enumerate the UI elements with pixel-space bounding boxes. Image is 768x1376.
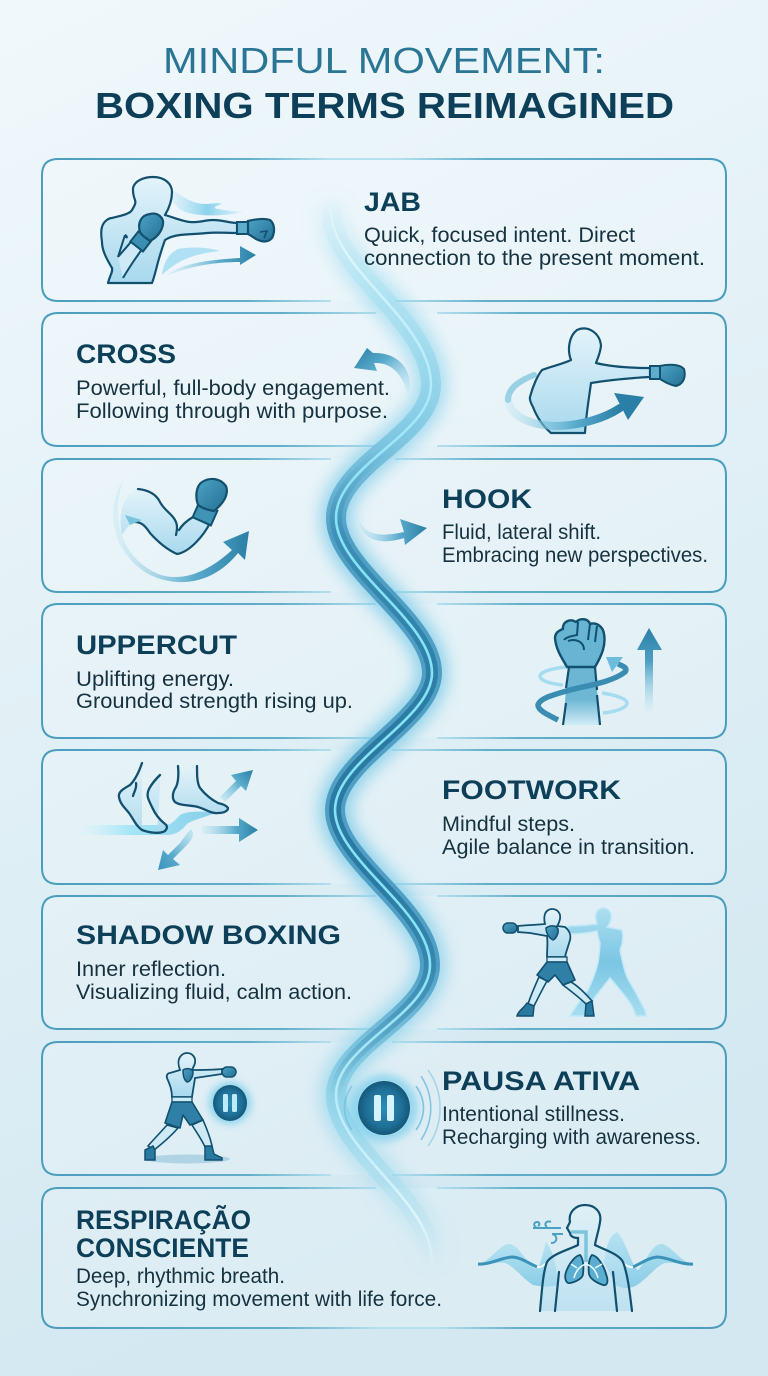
heading: respiração consciente: CONSCIENTE <box>76 1233 249 1263</box>
panel: respiração consciente <box>76 1204 693 1311</box>
panel: shadow boxing <box>76 908 646 1016</box>
icon: boxer and shadow <box>503 908 646 1016</box>
icon: feet with arrows <box>78 763 258 870</box>
text: hook description: Fluid, lateral shift. <box>442 521 601 544</box>
text: respiração description <box>76 1265 442 1311</box>
title: MINDFUL MOVEMENT: <box>163 40 605 81</box>
panel: cross <box>76 328 685 433</box>
text: cross description <box>76 377 390 423</box>
heading: respiração consciente <box>76 1204 251 1263</box>
heading: respiração consciente: RESPIRAÇÃO <box>76 1204 251 1235</box>
icon: boxer with pause <box>144 1053 251 1164</box>
text: footwork description: Agile balance in transition. <box>442 836 695 859</box>
text: cross description: Following through with purpose. <box>76 400 388 423</box>
text: cross description: Powerful, full-body engagement. <box>76 377 390 400</box>
text: respiração description: Synchronizing movement with life force. <box>76 1288 442 1311</box>
text: shadow boxing description <box>76 958 352 1004</box>
title: BOXING TERMS REIMAGINED <box>95 85 674 126</box>
heading: hook: HOOK <box>442 484 533 514</box>
text: jab description <box>364 224 705 270</box>
text: pausa ativa description <box>442 1103 701 1149</box>
panel: pausa ativa <box>144 1053 701 1164</box>
heading: jab: JAB <box>364 187 421 217</box>
heading: uppercut: UPPERCUT <box>76 630 238 660</box>
icon: hook arm <box>113 479 249 582</box>
text: uppercut description <box>76 668 353 713</box>
icon: jab boxer <box>101 177 274 283</box>
title <box>95 40 674 126</box>
panel: jab <box>101 177 705 283</box>
arrow: hook curved right <box>358 518 427 545</box>
heading: cross: CROSS <box>76 339 176 369</box>
text: pausa ativa description: Recharging with awareness. <box>442 1126 701 1149</box>
heading: footwork: FOOTWORK <box>442 775 622 805</box>
text: uppercut description: Grounded strength rising up. <box>76 690 353 713</box>
text: shadow boxing description: Inner reflection. <box>76 958 226 981</box>
text: uppercut description: Uplifting energy. <box>76 668 234 691</box>
central flowing ribbon <box>331 210 432 1262</box>
icon: lungs and breath wave <box>478 1205 693 1311</box>
text: hook description: Embracing new perspectives. <box>442 544 708 567</box>
text: jab description: Quick, focused intent. Direct <box>364 224 635 247</box>
icon: cross boxer <box>508 328 685 433</box>
text: pausa ativa description: Intentional stillness. <box>442 1103 625 1126</box>
text: respiração description: Deep, rhythmic breath. <box>76 1265 285 1288</box>
arrow: cross curved left <box>354 348 410 396</box>
text: jab description: connection to the present moment. <box>364 247 705 270</box>
panel: hook <box>113 479 708 582</box>
panel: card backgrounds and borders <box>42 159 726 1328</box>
text: hook description <box>442 521 708 567</box>
heading: shadow boxing: SHADOW BOXING <box>76 920 341 950</box>
icon: rising fist <box>538 619 662 725</box>
panel: footwork <box>78 763 695 870</box>
text: footwork description <box>442 813 695 859</box>
icon: large pause button <box>344 1070 440 1146</box>
text: shadow boxing description: Visualizing fluid, calm action. <box>76 981 352 1004</box>
heading: pausa ativa: PAUSA ATIVA <box>442 1066 640 1096</box>
text: footwork description: Mindful steps. <box>442 813 575 836</box>
panel: uppercut <box>76 619 662 725</box>
